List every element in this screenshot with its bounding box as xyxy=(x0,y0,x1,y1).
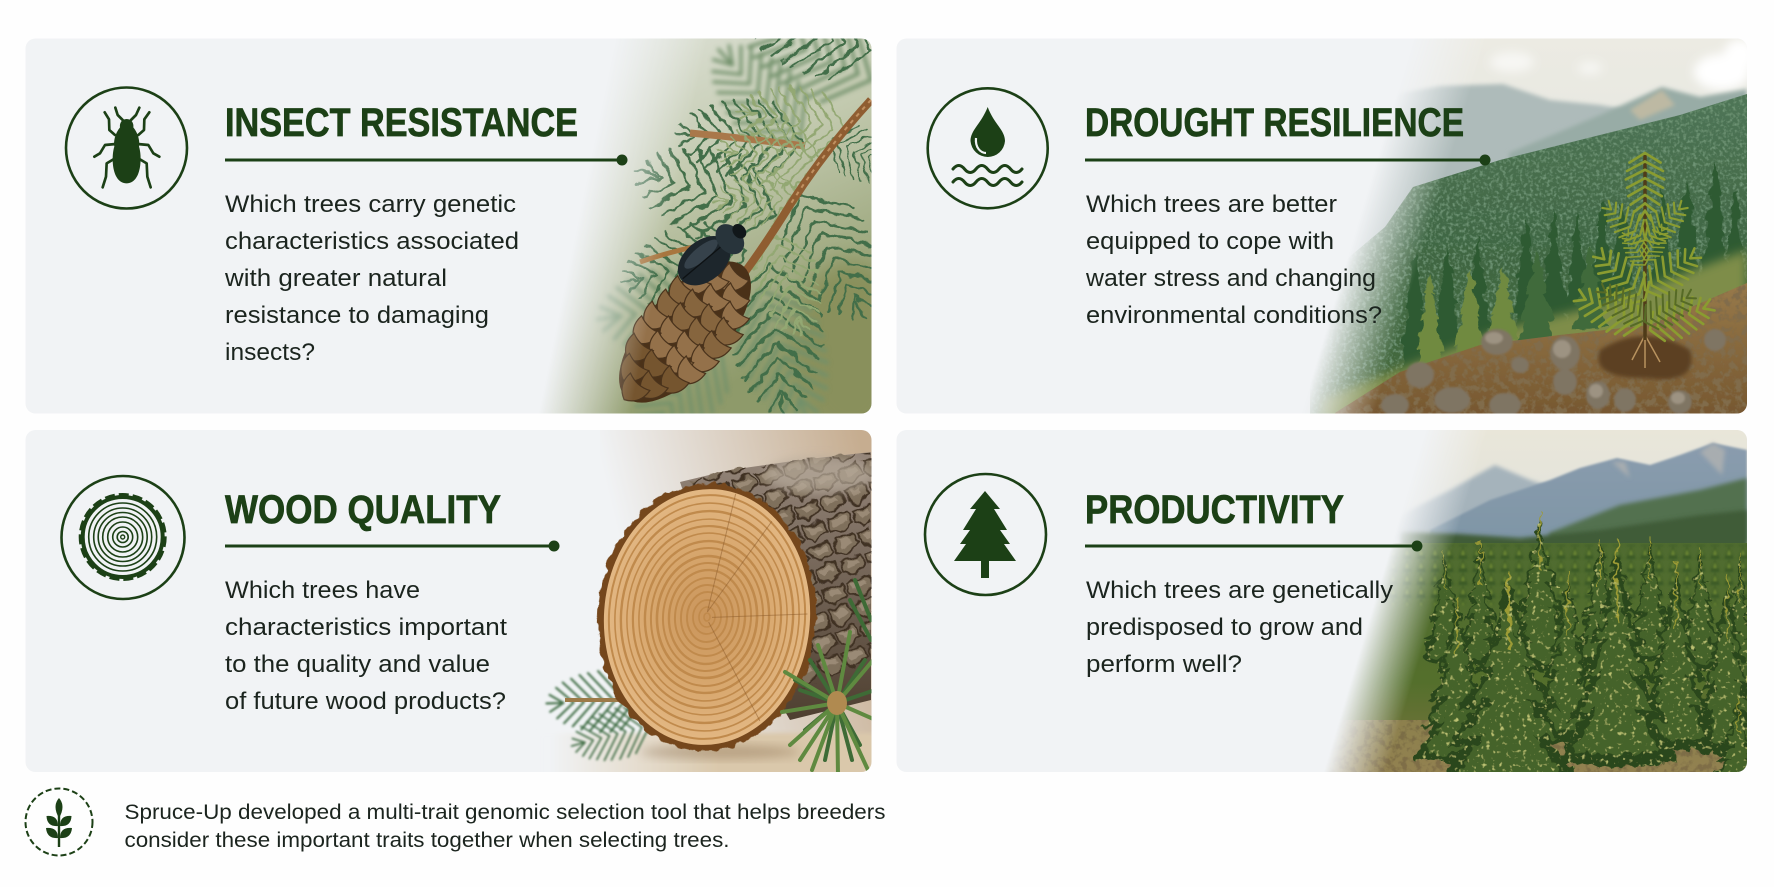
card background xyxy=(896,430,1747,772)
panel: drought resilience xyxy=(896,38,1756,420)
sapling xyxy=(1598,336,1692,379)
rocks xyxy=(1381,329,1726,417)
body text: Which trees are genetically xyxy=(1086,577,1393,604)
body text: Which trees carry genetic xyxy=(225,191,516,218)
cut face xyxy=(596,481,818,752)
photo: sapling on a dry mountainside xyxy=(1300,38,1756,420)
footer note xyxy=(26,788,886,856)
body text: Which trees have xyxy=(225,577,420,604)
body text xyxy=(1086,577,1393,678)
title: DROUGHT RESILIENCE xyxy=(1085,101,1464,145)
body text: water stress and changing xyxy=(1085,265,1376,292)
rule with end dot xyxy=(1085,154,1490,166)
card background xyxy=(26,430,872,772)
note text xyxy=(124,800,886,852)
title: PRODUCTIVITY xyxy=(1085,488,1344,532)
body text: environmental conditions? xyxy=(1086,302,1382,329)
photo: cut log with rings and pine sprigs xyxy=(540,430,880,778)
icon: water drop and waves xyxy=(928,88,1048,208)
note text: Spruce-Up developed a multi-trait genomic selection tool that helps breeders xyxy=(124,800,886,824)
body text: perform well? xyxy=(1086,651,1242,678)
side branches xyxy=(690,133,805,146)
icon: sprout in dashed circle xyxy=(26,788,92,856)
body text xyxy=(1085,191,1382,329)
body text: of future wood products? xyxy=(225,688,506,715)
title: INSECT RESISTANCE xyxy=(225,101,578,145)
body text xyxy=(224,191,519,366)
body text xyxy=(225,577,507,715)
icon: spruce tree xyxy=(925,474,1046,595)
body text: characteristics associated xyxy=(225,228,519,255)
rule with end dot xyxy=(225,540,560,552)
photo: beetle on spruce cone and branch xyxy=(544,38,872,414)
panel: wood quality xyxy=(26,430,880,778)
title: WOOD QUALITY xyxy=(225,488,501,532)
body text: characteristics important xyxy=(225,614,507,641)
rule with end dot xyxy=(1085,540,1422,552)
card background xyxy=(26,38,872,414)
icon: tree rings xyxy=(62,476,184,599)
pine cone xyxy=(590,236,777,430)
body text: with greater natural xyxy=(224,265,447,292)
body text: resistance to damaging xyxy=(225,302,489,329)
rule with end dot xyxy=(225,154,628,166)
main branch xyxy=(745,100,871,272)
needle sprig, right xyxy=(782,580,880,775)
bark xyxy=(680,452,871,720)
body text: predisposed to grow and xyxy=(1086,614,1363,641)
panel: productivity xyxy=(896,430,1769,802)
body text: equipped to cope with xyxy=(1086,228,1334,255)
panel: insect resistance xyxy=(26,0,914,463)
body text: insects? xyxy=(225,339,315,366)
beetle xyxy=(678,224,746,286)
body text: Which trees are better xyxy=(1086,191,1337,218)
body text: to the quality and value xyxy=(225,651,490,678)
card background xyxy=(896,38,1747,414)
note text: consider these important traits together when selecting trees. xyxy=(124,828,730,852)
photo: spruce plantation with mountains xyxy=(1327,430,1747,772)
icon: beetle in circle xyxy=(66,88,187,208)
